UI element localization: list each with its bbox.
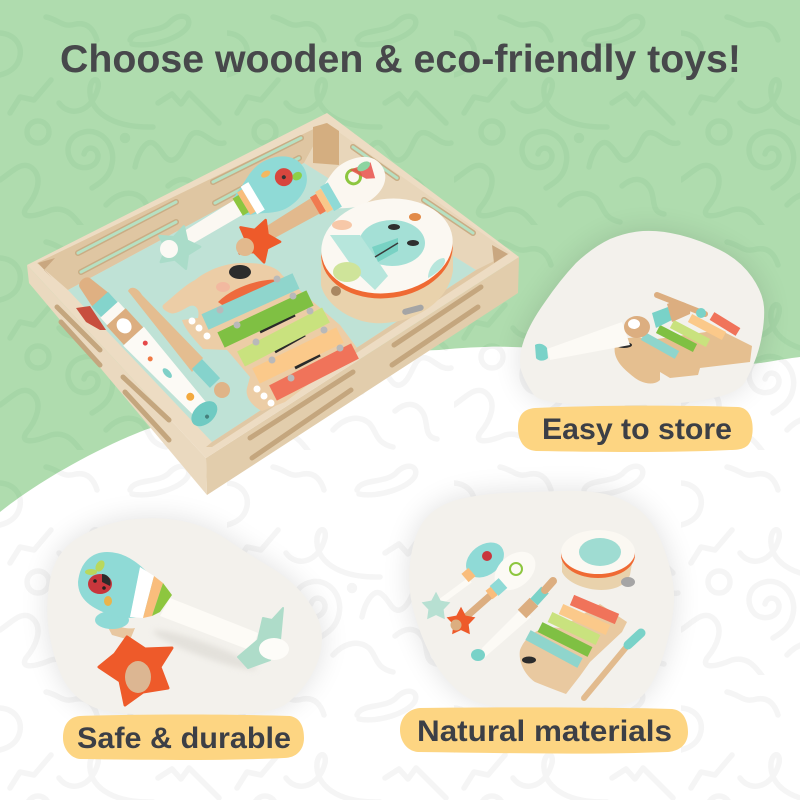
small xylophone — [520, 600, 627, 694]
tambourine — [315, 190, 459, 323]
xylophone — [162, 263, 357, 411]
mint star — [153, 221, 204, 271]
label pill: Safe & durable — [77, 722, 291, 755]
title: Choose wooden & eco-friendly toys! — [60, 38, 741, 81]
red star large — [99, 637, 172, 705]
small drumstick — [584, 633, 641, 698]
wooden tray with instruments — [27, 113, 519, 495]
shadow under maraca — [151, 625, 259, 675]
wood knob — [236, 238, 254, 256]
label pill — [63, 714, 304, 760]
white knob — [160, 240, 178, 258]
panel: natural materials — [400, 491, 688, 754]
teal maraca — [169, 145, 317, 263]
orange maraca — [239, 147, 394, 263]
wooden handle behind — [100, 612, 135, 640]
small maracas — [424, 535, 543, 632]
label pill — [400, 707, 688, 754]
label pill: Natural materials — [417, 715, 672, 748]
panel: safe and durable — [47, 518, 322, 760]
flute — [71, 270, 222, 431]
label pill — [518, 406, 753, 452]
orange star — [232, 213, 285, 265]
red leaf decal — [76, 306, 106, 330]
small flute — [471, 581, 553, 661]
white knob — [259, 638, 289, 660]
small tambourine — [561, 530, 635, 590]
tray shell — [27, 113, 519, 495]
white lower background with wave edge — [0, 347, 800, 800]
panel: easy to store — [518, 231, 764, 452]
large maraca — [78, 552, 258, 651]
small flute — [535, 301, 706, 361]
mint star large — [238, 608, 283, 668]
small xylophone — [615, 295, 752, 384]
label pill: Easy to store — [542, 413, 732, 446]
drumstick — [128, 288, 230, 398]
teal head behind — [95, 611, 129, 629]
